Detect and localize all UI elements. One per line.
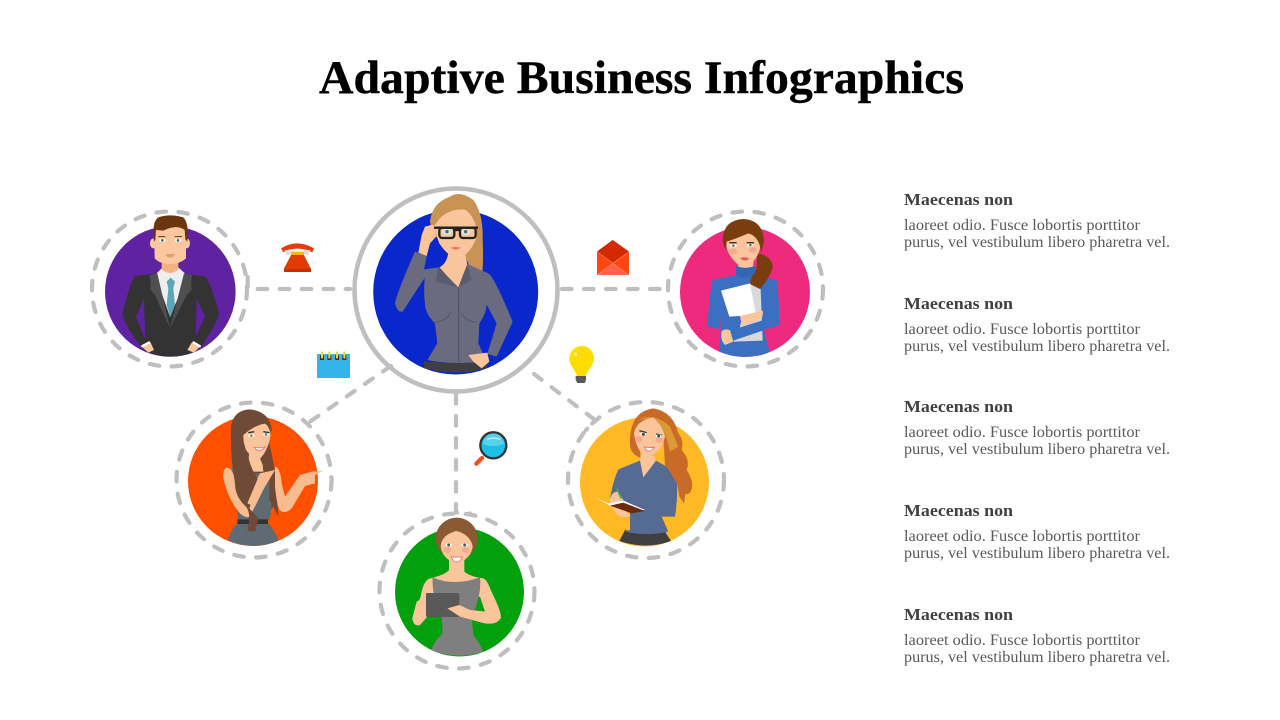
text block 4: Maecenas non [904,501,1013,520]
yellow disc [580,418,709,546]
icon: magnifying glass [476,432,506,464]
node: woman in green circle [380,514,534,668]
dashed ring [568,402,724,558]
dashed ring [668,212,823,366]
connector: centre to pink circle [562,287,664,291]
text block 1: purus, vel vestibulum libero pharetra vel. [904,234,1170,251]
icon: envelope [597,240,629,275]
icon: telephone [281,243,314,272]
pink disc [680,227,810,357]
figure: woman with tablet [412,518,501,656]
text block 3 [904,397,1170,458]
node: woman in pink circle [668,212,823,366]
node: centre woman with glasses [354,188,558,392]
figure: woman with notebook [595,408,692,545]
icon: light bulb [569,346,594,383]
dashed ring [380,514,534,668]
node: man in suit [92,212,247,366]
text block 5 [904,605,1170,666]
text block 4 [904,501,1170,562]
text block 3: purus, vel vestibulum libero pharetra vel. [904,441,1170,458]
connector: centre to yellow circle [534,374,595,430]
text block 5: purus, vel vestibulum libero pharetra vel. [904,649,1170,666]
figure: man [122,215,219,357]
purple disc [105,226,236,357]
text block 2 [904,294,1170,355]
text block 5: laoreet odio. Fusce lobortis porttitor [904,632,1141,649]
orange disc [188,416,318,546]
text block 4: laoreet odio. Fusce lobortis porttitor [904,528,1141,545]
text block 3: Maecenas non [904,397,1013,416]
text block 4: purus, vel vestibulum libero pharetra vel. [904,545,1170,562]
dashed ring [176,402,332,558]
node: woman in orange circle [176,402,332,558]
text block 2: purus, vel vestibulum libero pharetra vel. [904,338,1170,355]
solid ring [354,188,558,392]
title: Adaptive Business Infographics [319,52,964,104]
text block 5: Maecenas non [904,605,1013,624]
green disc [395,528,524,656]
text block 1: Maecenas non [904,190,1013,209]
text block 1 [904,190,1170,251]
connector: centre to green circle [456,394,470,514]
text block 1: laoreet odio. Fusce lobortis porttitor [904,217,1141,234]
text block 2: Maecenas non [904,294,1013,313]
connector: centre to orange circle [308,366,391,423]
text block 2: laoreet odio. Fusce lobortis porttitor [904,321,1141,338]
blue disc [373,210,538,374]
connector: centre to man [248,277,350,289]
dashed ring [92,212,247,366]
figure: centre woman [395,194,513,372]
node: woman in yellow circle [568,402,724,558]
figure: woman pointing [223,409,323,546]
text block 3: laoreet odio. Fusce lobortis porttitor [904,424,1141,441]
figure: woman with papers [708,219,779,357]
icon: notepad [317,351,350,378]
